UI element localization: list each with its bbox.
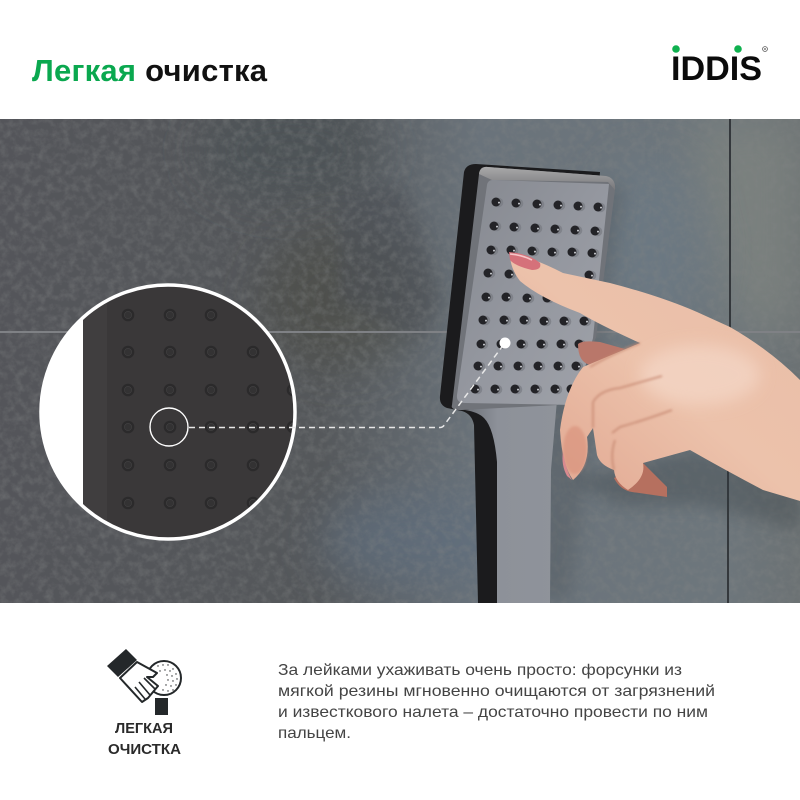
callout: dashed leader line — [189, 344, 504, 428]
logo: IDDIS: IDDIS — [671, 50, 762, 88]
index fingernail — [509, 252, 540, 270]
white area — [42, 320, 83, 504]
lighter strip — [83, 280, 107, 550]
icon: hand cleaning shower head — [107, 649, 181, 715]
finger creases — [590, 343, 672, 470]
middle fingertip with nail — [578, 341, 625, 365]
callout: white dot — [500, 338, 510, 348]
description text — [278, 662, 715, 742]
zoomed nozzles — [122, 309, 299, 509]
head rim — [452, 167, 615, 410]
icon label — [108, 721, 182, 758]
finger lines — [135, 678, 155, 699]
description text: За лейками ухаживать очень просто: форсунки из — [278, 662, 682, 679]
description text: мягкой резины мгновенно очищаются от загрязнений — [278, 683, 715, 700]
icon label: ОЧИСТКА — [108, 742, 182, 758]
callout: small ring — [150, 408, 188, 446]
hand body and fingers — [510, 254, 800, 501]
ring fingertip — [614, 463, 667, 497]
lower nail — [562, 452, 572, 480]
description text: и известкового налета – достаточно провести по ним — [278, 704, 708, 721]
wall background — [0, 100, 800, 603]
title: Легкая очистка — [32, 53, 268, 88]
shower head — [440, 164, 625, 603]
black side of head and handle — [440, 164, 600, 603]
zoom lens — [40, 280, 299, 550]
nozzles — [470, 198, 605, 394]
hand — [509, 252, 800, 530]
fingertip tone — [563, 426, 587, 474]
spray dots — [157, 664, 178, 692]
hand outline — [120, 662, 158, 702]
shower handle — [155, 698, 168, 715]
description text: пальцем. — [278, 725, 351, 742]
head shadow on wall — [550, 192, 620, 596]
hand shadow — [570, 450, 800, 530]
highlight on back of hand — [640, 345, 760, 405]
photo panel: shower head on tiled wall — [0, 100, 800, 603]
cuff — [107, 649, 137, 677]
handle — [465, 400, 557, 603]
tile joints — [0, 119, 800, 603]
icon label: ЛЕГКАЯ — [115, 721, 173, 737]
head face — [457, 180, 609, 405]
shower head disc — [147, 661, 181, 695]
